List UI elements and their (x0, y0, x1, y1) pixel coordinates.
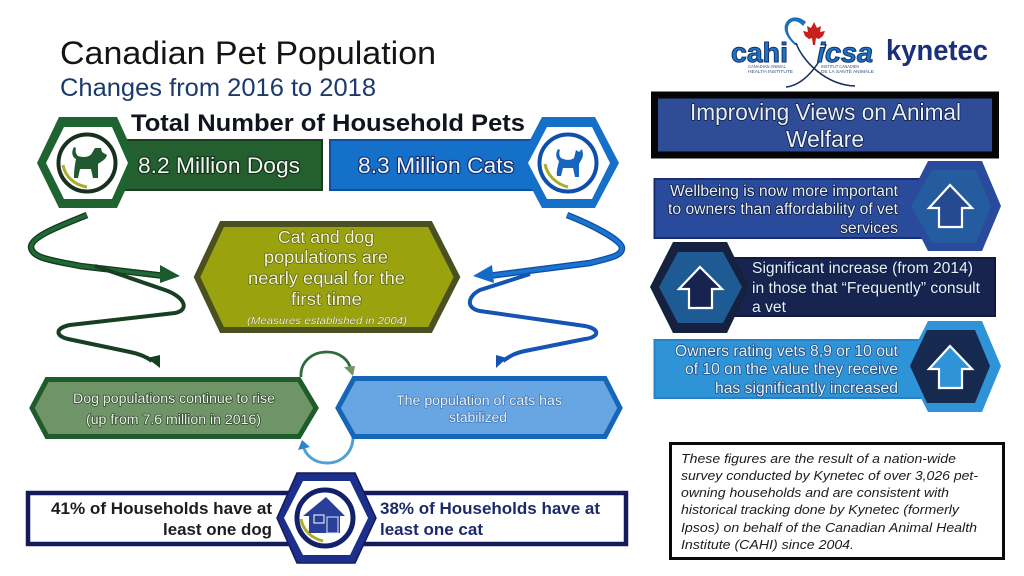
heading: total number of household pets: Total Number of Household Pets (131, 110, 525, 137)
wellbeing hexagon (905, 161, 1001, 251)
consult text: in those that “Frequently” consult (752, 280, 981, 297)
value text (675, 343, 899, 397)
cat household text: 38% of Households have at (380, 500, 601, 518)
dog population text (73, 391, 275, 427)
arrow: green cycle arc (301, 352, 355, 377)
logo: CAHI ICSA: INSTITUT CANADIEN (821, 64, 859, 69)
value text: has significantly increased (715, 380, 898, 397)
panel: value rating (654, 321, 1001, 412)
panel: cats stabilized (338, 378, 620, 436)
cat population text: stabilized (449, 410, 507, 425)
panel: dog populations rise (32, 380, 316, 436)
consult text (752, 260, 981, 316)
panel: survey note (670, 444, 1004, 558)
cat bar (330, 140, 542, 190)
panel: wellbeing (654, 161, 1001, 251)
icon: maple leaf (803, 22, 825, 45)
cat population text (396, 393, 562, 425)
icon: up arrow (929, 346, 972, 388)
cat household text (380, 500, 601, 539)
logo: CAHI ICSA: icsa (817, 37, 873, 68)
callout text: populations are (264, 247, 388, 267)
callout text: nearly equal for the (248, 268, 405, 288)
logo: CAHI ICSA: CANADIAN ANIMAL (748, 64, 786, 69)
value text: Owners rating vets 8,9 or 10 out (675, 343, 899, 360)
panel: household share dog (28, 493, 298, 544)
heading text: Welfare (786, 126, 864, 152)
wellbeing text: Wellbeing is now more important (670, 183, 899, 200)
callout text (247, 227, 407, 327)
panel: cat and dog callout (197, 224, 457, 330)
cat household text: least one cat (380, 521, 484, 539)
arrow: blue cycle arc (298, 437, 353, 463)
icon: cat (556, 149, 583, 177)
panel: household share cat (356, 493, 626, 544)
wellbeing text: to owners than affordability of vet (668, 201, 899, 218)
value hexagon (905, 321, 1001, 412)
survey text (681, 451, 979, 552)
callout text: first time (291, 289, 362, 309)
title: Canadian Pet Population (60, 35, 436, 71)
icon: house hexagon badge (277, 473, 376, 563)
survey text: Institute (CAHI) since 2004. (681, 537, 854, 552)
panel: improving views heading (654, 95, 996, 155)
survey text: These figures are the result of a nation-wide (681, 451, 956, 466)
subtitle: Changes from 2016 to 2018 (60, 74, 376, 102)
survey text: historical tracking done by Kynetec (formerly (681, 502, 960, 517)
wellbeing text (668, 183, 899, 237)
dog bar (110, 140, 322, 190)
icon: dog (72, 147, 107, 178)
logo: CAHI ICSA: DE LA SANTÉ ANIMALE (821, 68, 874, 74)
logo: CAHI ICSA: cahi (731, 37, 788, 68)
callout text: (Measures established in 2004) (247, 315, 407, 327)
logo: CAHI ICSA (731, 17, 874, 87)
dog hexagon badge (37, 117, 138, 208)
wellbeing text: services (840, 220, 898, 237)
cat population text: The population of cats has (396, 393, 562, 408)
value text: of 10 on the value they receive (685, 361, 898, 378)
dog population text: Dog populations continue to rise (73, 391, 275, 406)
arrow: cat wavy arrows (470, 215, 622, 368)
heading text: Improving Views on Animal (690, 99, 961, 125)
dog household text: 41% of Households have at (51, 500, 273, 518)
survey text: survey conducted by Kynetec of over 3,026 pet- (681, 468, 979, 483)
swoosh ribbons (785, 17, 806, 45)
logo: CAHI ICSA: HEALTH INSTITUTE (748, 69, 793, 74)
dog household text: least one dog (163, 521, 272, 539)
consult hexagon (650, 242, 749, 333)
survey text: Ipsos) on behalf of the Canadian Animal Health (681, 520, 977, 535)
icon: up arrow (679, 267, 722, 308)
dog count: 8.2 Million Dogs (138, 153, 300, 178)
consult text: a vet (752, 299, 787, 316)
cat hexagon badge (518, 117, 619, 208)
panel: dogs total (37, 117, 322, 208)
heading text (690, 99, 961, 152)
dog household text (51, 500, 273, 539)
consult text: Significant increase (from 2014) (752, 260, 973, 277)
logo: kynetec: kynetec (886, 35, 988, 67)
panel: consult a vet (650, 242, 995, 333)
panel: cats total (330, 117, 619, 208)
arrow: dog wavy arrows (31, 215, 184, 368)
dog population text: (up from 7.6 million in 2016) (86, 412, 261, 427)
callout text: Cat and dog (278, 227, 374, 247)
cat count: 8.3 Million Cats (358, 153, 514, 178)
survey text: owning households and are consistent with (681, 485, 949, 500)
icon: up arrow (929, 185, 972, 227)
